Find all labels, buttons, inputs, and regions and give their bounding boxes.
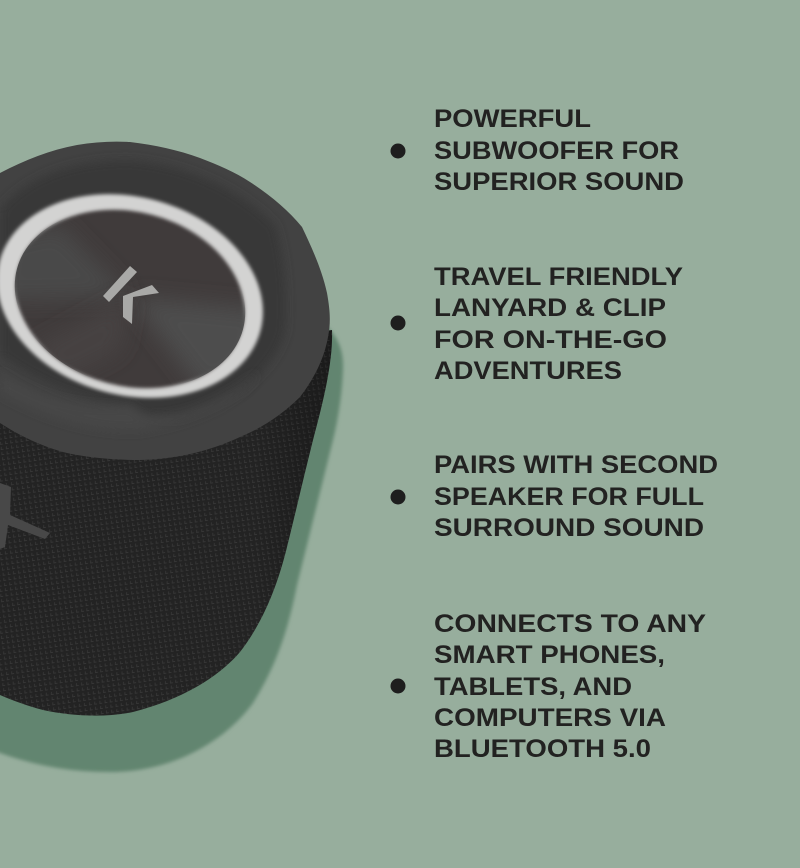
bullet (390, 490, 406, 504)
bullet (390, 316, 406, 330)
feature 4 text (434, 610, 706, 763)
feature 2 text (434, 263, 683, 385)
feature 1 text: SUBWOOFER FOR (434, 137, 679, 165)
feature 4 (390, 610, 706, 763)
feature 3 text: SPEAKER FOR FULL (434, 483, 704, 511)
feature 1 text (434, 105, 684, 196)
speaker shadow (0, 320, 343, 772)
feature 3 text: PAIRS WITH SECOND (434, 451, 718, 479)
feature 2 text: LANYARD & CLIP (434, 294, 666, 322)
feature 4 text: SMART PHONES, (434, 641, 665, 669)
feature 2 text: TRAVEL FRIENDLY (434, 263, 683, 291)
speaker fabric body (0, 320, 340, 720)
feature 1 (390, 105, 684, 196)
feature 2 (390, 263, 683, 385)
bullet (390, 678, 406, 694)
feature 4 text: CONNECTS TO ANY (434, 610, 706, 638)
feature 1 text: SUPERIOR SOUND (434, 168, 684, 196)
feature 3 (390, 451, 718, 542)
cap lower rim (0, 372, 258, 430)
feature 4 text: COMPUTERS VIA (434, 704, 666, 732)
feature 2 text: ADVENTURES (434, 357, 622, 385)
feature 2 text: FOR ON-THE-GO (434, 326, 667, 354)
speaker top cap (0, 142, 330, 460)
feature 1 text: POWERFUL (434, 105, 591, 133)
fabric side logo (0, 483, 50, 549)
speaker illustration (0, 142, 343, 772)
metal disc (12, 207, 248, 391)
disc brushed highlights (14, 218, 246, 384)
feature 4 text: TABLETS, AND (434, 673, 632, 701)
bullet (390, 144, 406, 158)
logo K (103, 266, 159, 324)
feature 3 text: SURROUND SOUND (434, 514, 704, 542)
glowing ring (0, 165, 286, 427)
feature 3 text (434, 451, 718, 542)
cap inner recess (0, 160, 286, 418)
feature 4 text: BLUETOOTH 5.0 (434, 735, 651, 763)
